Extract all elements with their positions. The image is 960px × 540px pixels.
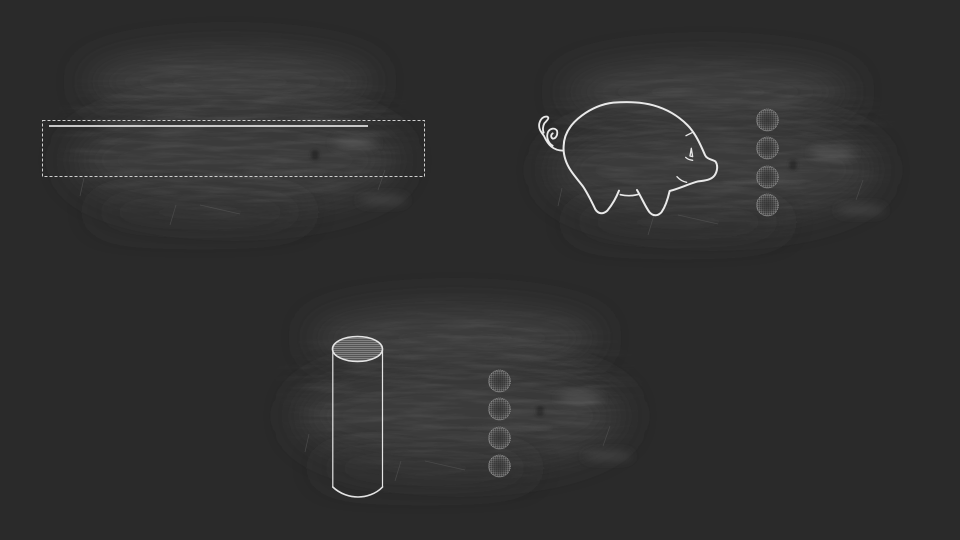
dots: bottom column <box>488 370 511 477</box>
icon: cylinder <box>332 336 382 497</box>
chalk dust texture <box>84 66 840 452</box>
dots: right column <box>756 109 779 216</box>
dashed selection box <box>42 120 424 176</box>
panel: chalk smudge bottom <box>295 308 632 481</box>
cylinder top <box>332 336 382 362</box>
pig belly <box>620 194 639 196</box>
pig tail <box>539 117 563 151</box>
pig body outline <box>564 102 717 215</box>
cylinder base <box>333 487 382 497</box>
chalk line <box>49 125 368 127</box>
panel: chalk smudge right <box>548 62 885 235</box>
cylinder sides <box>333 350 382 487</box>
pig eye and face marks <box>677 133 693 182</box>
panel: chalk smudge left <box>70 52 407 225</box>
icon: piggy bank <box>539 102 717 215</box>
